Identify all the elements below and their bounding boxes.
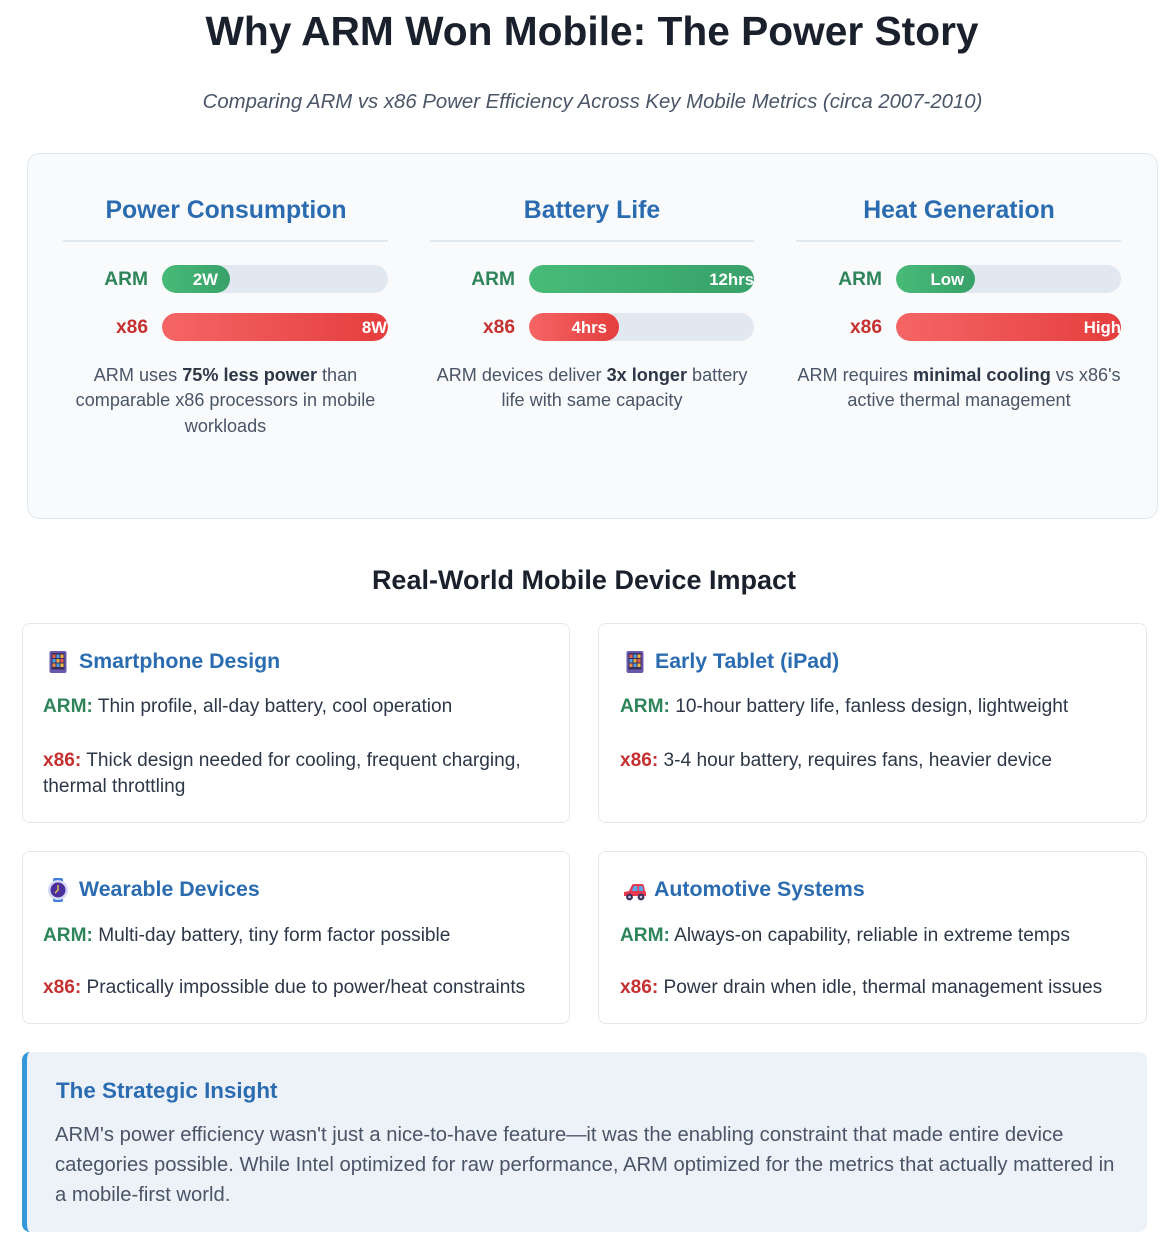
ARM text: ARM: Thin profile, all-day battery, cool operation	[43, 696, 452, 717]
metric: battery life	[430, 197, 754, 410]
label: x86: x86	[850, 317, 882, 338]
description: ARM devices deliver 3x longer battery life with same capacity	[437, 365, 747, 410]
label: ARM: ARM	[838, 269, 882, 290]
card heading: Early Tablet (iPad)	[655, 649, 839, 673]
bar: x86 4hrs	[529, 313, 754, 341]
metric: power consumption	[63, 197, 388, 436]
ARM text: ARM: Always-on capability, reliable in extreme temps	[620, 925, 1070, 946]
ARM text: ARM: 10-hour battery life, fanless design, lightweight	[620, 696, 1068, 717]
title: Why ARM Won Mobile: The Power Story	[205, 8, 979, 54]
section heading: Real-World Mobile Device Impact	[372, 565, 796, 595]
bar: x86 8W: 8W	[362, 318, 387, 337]
heading: heat generation: Heat Generation	[863, 197, 1055, 224]
x86 text: x86: Thick design needed for cooling, frequent charging, thermal throttling	[43, 750, 521, 797]
label: ARM: ARM	[104, 269, 148, 290]
bar: ARM 12hrs	[529, 265, 754, 293]
icon: tablet	[626, 651, 644, 673]
card: smartphone design	[22, 623, 570, 823]
bar: ARM 12hrs: 12hrs	[709, 270, 754, 289]
x86 text: x86: 3-4 hour battery, requires fans, heavier device	[620, 750, 1052, 771]
bar: ARM 2W	[162, 265, 388, 293]
card heading: Smartphone Design	[79, 649, 280, 673]
label: x86: x86	[483, 317, 515, 338]
bar: x86 high	[896, 313, 1121, 341]
panel: metrics comparison	[27, 153, 1158, 519]
x86 text: x86: Practically impossible due to power/heat constraints	[43, 977, 525, 998]
bar: x86 8W	[162, 313, 388, 341]
description: ARM uses 75% less power than comparable x86 processors in mobile workloads	[76, 365, 375, 436]
card heading: Wearable Devices	[79, 877, 260, 901]
bar: ARM low	[896, 265, 1121, 293]
card: wearable devices	[22, 851, 570, 1024]
callout heading: The Strategic Insight	[56, 1078, 277, 1103]
description: ARM requires minimal cooling vs x86's active thermal management	[797, 365, 1121, 410]
label: x86: x86	[116, 317, 148, 338]
bar: ARM 2W: 2W	[193, 270, 218, 289]
ARM text: ARM: Multi-day battery, tiny form factor possible	[43, 925, 450, 946]
icon: watch	[48, 878, 68, 902]
card: automotive systems	[598, 851, 1147, 1024]
callout: strategic insight	[22, 1052, 1147, 1232]
metric: heat generation	[796, 197, 1121, 410]
subtitle: Comparing ARM vs x86 Power Efficiency Across Key Mobile Metrics (circa 2007-2010)	[203, 91, 982, 113]
heading: power consumption: Power Consumption	[105, 197, 347, 224]
card heading: Automotive Systems	[654, 877, 865, 901]
label: ARM: ARM	[471, 269, 515, 290]
icon: car	[624, 884, 646, 900]
icon: smartphone	[50, 651, 66, 673]
bar: ARM low: Low	[930, 270, 964, 289]
heading: battery life: Battery Life	[524, 197, 660, 224]
callout text: ARM's power efficiency wasn't just a nice-to-have feature—it was the enabling constraint that made entire device categories possible. While Intel optimized for raw performance, ARM optimized for the metrics that actually mattered in a mobile-first world.	[55, 1124, 1114, 1206]
x86 text: x86: Power drain when idle, thermal management issues	[620, 977, 1102, 998]
bar: x86 4hrs: 4hrs	[572, 318, 607, 337]
bar: x86 high: High	[1084, 318, 1121, 337]
card: early tablet	[598, 623, 1147, 823]
